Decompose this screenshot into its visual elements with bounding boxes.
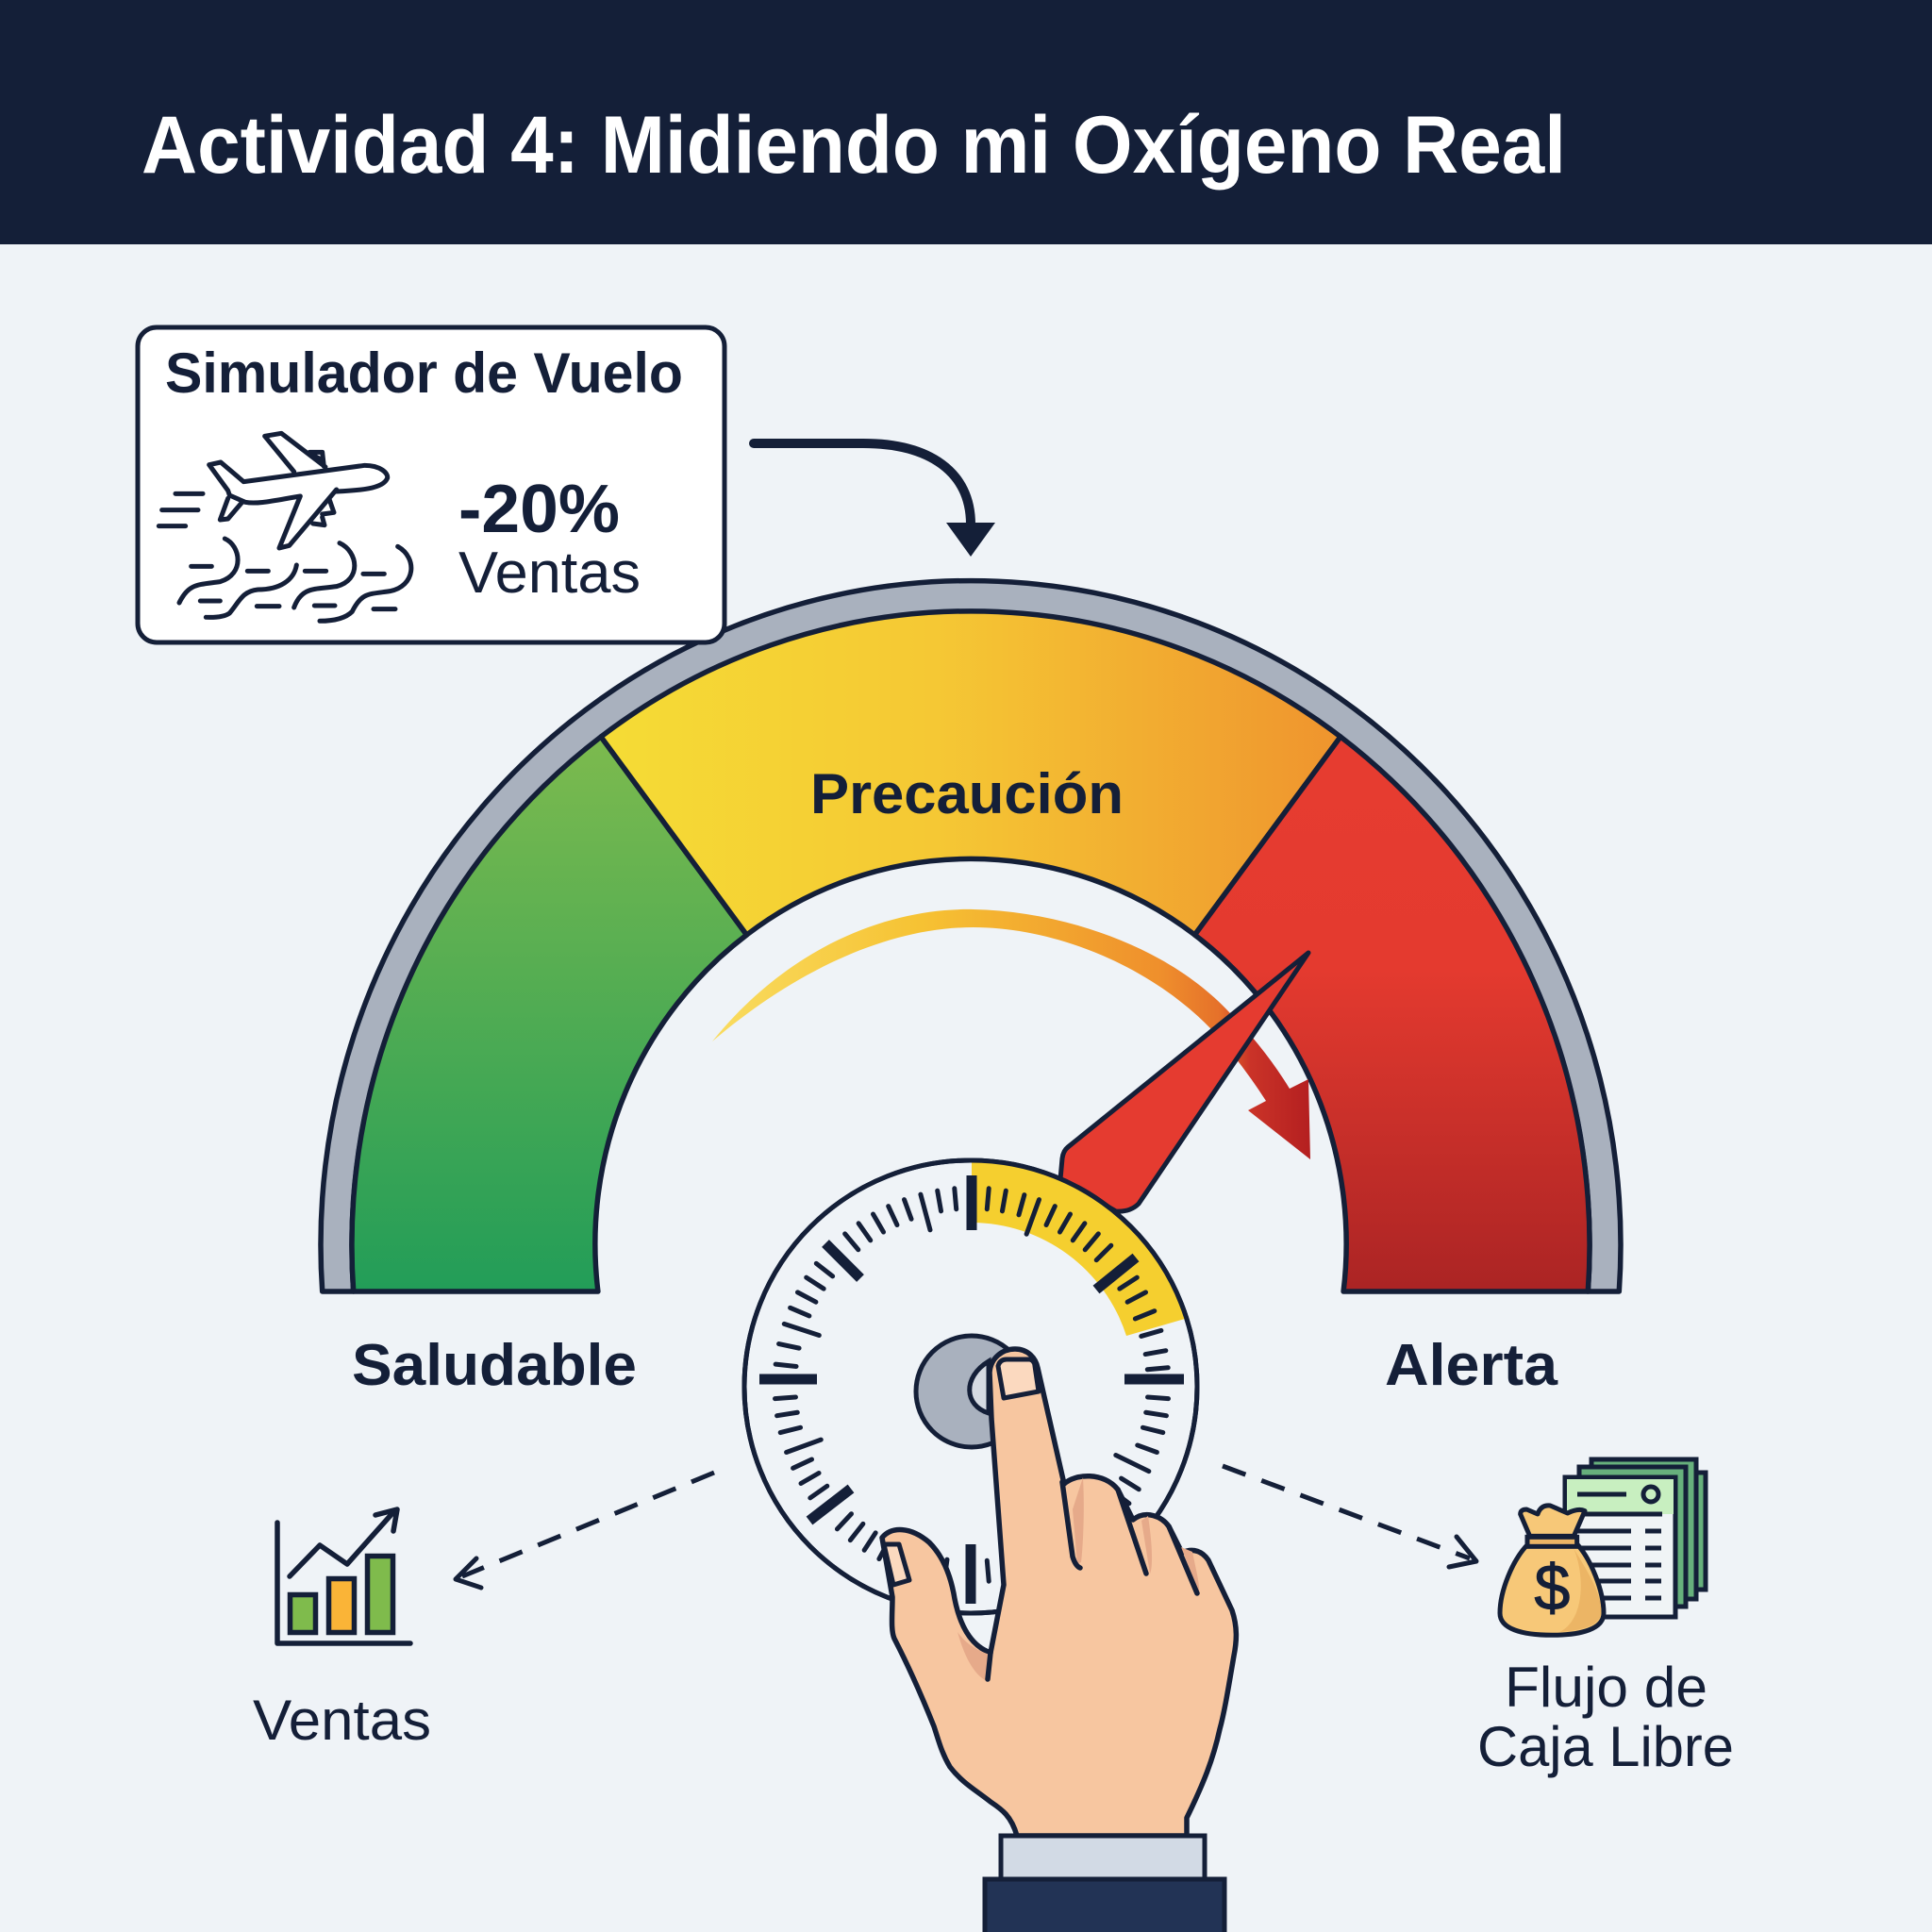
value: -20%: -20% — [458, 472, 620, 547]
dial ticks — [775, 1189, 1168, 1581]
panel heading: Simulador de Vuelo — [165, 341, 683, 405]
statement seal — [1643, 1487, 1658, 1502]
value label: Ventas: Ventas — [458, 541, 641, 606]
label: Precaución: Precaución — [810, 762, 1124, 825]
turbulence dashes — [192, 566, 395, 609]
hand creases — [988, 1482, 1197, 1679]
icon: airplane in turbulence — [158, 433, 411, 621]
label: Flujo de Caja Libre: Flujo de — [1505, 1656, 1707, 1719]
hand pressing dial — [882, 1349, 1236, 1932]
dashed arrow to Flujo de Caja — [1223, 1466, 1476, 1567]
statement back sheets — [1591, 1459, 1696, 1599]
simulator panel — [138, 327, 724, 642]
chart axes — [277, 1523, 410, 1643]
gauge needle — [1060, 953, 1308, 1211]
label: Flujo de Caja Libre: Caja Libre — [1477, 1715, 1734, 1778]
chart trend arrow — [290, 1509, 397, 1576]
dial major ticks — [759, 1175, 1184, 1604]
curved trend arrow yellow to red — [712, 909, 1310, 1159]
gauge outer grey rim — [321, 581, 1621, 1291]
finger shadows — [958, 1477, 1199, 1681]
zone: yellow Precaución — [601, 611, 1341, 935]
chart bars — [291, 1594, 315, 1632]
money bag: $ — [1534, 1553, 1570, 1624]
dial yellow sector — [972, 1162, 1185, 1336]
shirt cuff — [1001, 1836, 1205, 1879]
gauge: semicircular zones — [321, 581, 1621, 1291]
index nail — [998, 1359, 1039, 1398]
icon: money bag and statements — [1500, 1459, 1706, 1635]
dial centre hub — [916, 1336, 1027, 1447]
statement lines — [1563, 1494, 1662, 1598]
arrow: simulator to gauge — [754, 443, 995, 557]
header band — [0, 0, 1932, 244]
dial ring redraw — [744, 1160, 1197, 1613]
title: Actividad 4: Midiendo mi Oxígeno Real — [142, 100, 1566, 191]
hub highlight — [970, 1361, 989, 1413]
label: Alerta: Alerta — [1385, 1333, 1558, 1398]
dial knob — [744, 1160, 1197, 1613]
speed lines — [158, 493, 203, 526]
label: Ventas: Ventas — [253, 1689, 431, 1752]
thumb nail — [884, 1544, 909, 1585]
label: Flujo de Caja Libre — [1477, 1656, 1734, 1778]
dashed arrow to Ventas — [456, 1473, 714, 1588]
icon: sales bar chart — [277, 1509, 410, 1643]
dial face — [744, 1160, 1197, 1613]
zone: green Saludable — [352, 737, 747, 1291]
plane tail and wing details — [220, 433, 334, 525]
label: Saludable: Saludable — [352, 1333, 637, 1398]
plane body — [209, 462, 388, 548]
statement front sheet — [1565, 1477, 1675, 1617]
jacket sleeve — [985, 1879, 1224, 1932]
money bag — [1500, 1506, 1604, 1635]
panel box — [138, 327, 724, 642]
zone: red Alerta — [1194, 737, 1590, 1291]
turbulence swirls — [179, 539, 411, 621]
hand silhouette — [882, 1349, 1236, 1836]
